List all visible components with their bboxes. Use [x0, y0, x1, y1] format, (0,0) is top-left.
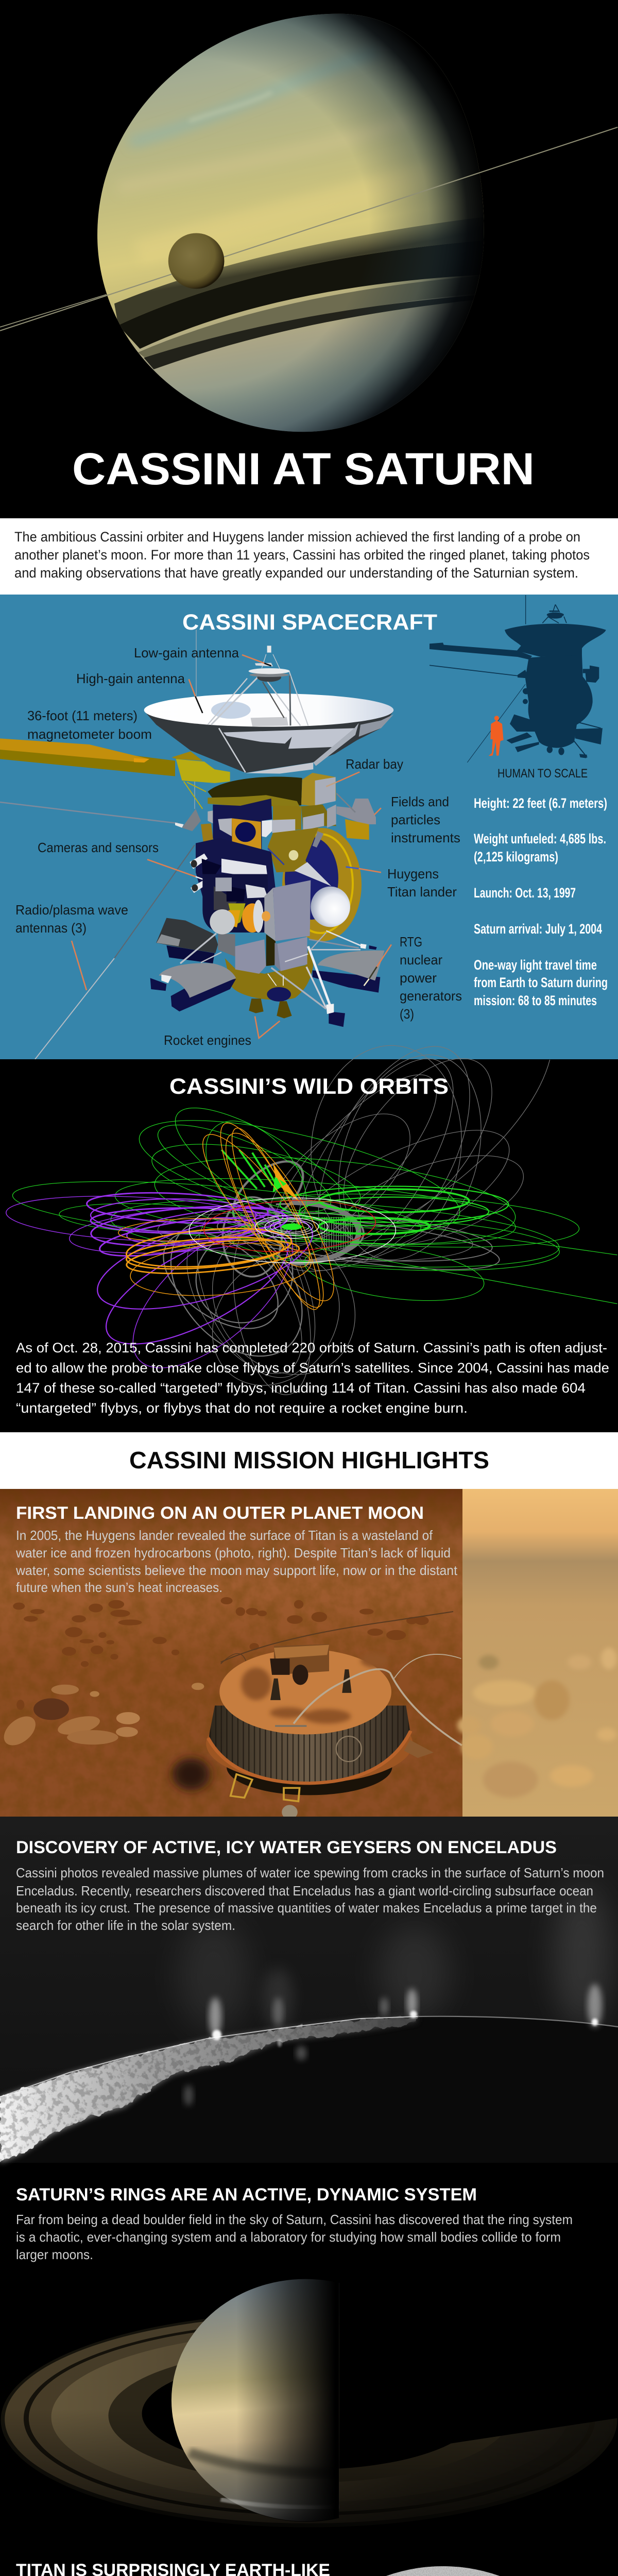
intro text: and making observations that have greatly expanded our understanding of the Saturnian system. — [14, 565, 578, 581]
component labels: HUMAN TO SCALE — [497, 767, 588, 781]
body text: water ice and frozen hydrocarbons (photo, right). Despite Titan’s lack of liquid — [15, 1545, 451, 1561]
moon: Titan — [168, 233, 224, 289]
gold band — [273, 805, 301, 831]
orbit text — [16, 1340, 609, 1416]
photo: Titan surface — [457, 1489, 618, 1817]
planet — [171, 2279, 339, 2522]
component labels: (3) — [400, 1006, 414, 1022]
grey orbits — [144, 1026, 550, 1406]
panel: Cassini's wild orbits — [0, 1026, 618, 1432]
component labels: Huygens — [387, 866, 439, 882]
cables — [221, 1612, 461, 1679]
body text — [15, 1528, 458, 1595]
moon orbits — [202, 1197, 377, 1256]
plumes — [184, 1984, 602, 2106]
radar bay — [301, 773, 336, 806]
component labels: Titan lander — [387, 884, 457, 900]
scale silhouette — [430, 595, 606, 762]
lander top deck — [219, 1649, 391, 1735]
component labels: antennas (3) — [15, 920, 87, 936]
purple orbits — [5, 1189, 324, 1392]
body text: In 2005, the Huygens lander revealed the surface of Titan is a wasteland of — [16, 1528, 433, 1543]
orbit text: “untargeted” flybys, or flybys that do not require a rocket engine burn. — [16, 1400, 468, 1416]
landing struts — [180, 931, 362, 1009]
photo: Titan moon — [386, 2566, 500, 2576]
low-gain antenna — [208, 646, 308, 725]
orbit text: ed to allow the probe to make close flybys of Saturn’s satellites. Since 2004, Cassini has made — [16, 1360, 609, 1376]
upper spacecraft — [0, 646, 393, 896]
legs — [231, 1774, 300, 1801]
heading: FIRST LANDING ON AN OUTER PLANET MOON — [16, 1503, 424, 1523]
callouts — [147, 655, 381, 880]
equipment boxes — [218, 880, 311, 974]
orange orbits — [118, 1114, 352, 1316]
navy hull — [202, 874, 268, 933]
body text: Far from being a dead boulder field in the sky of Saturn, Cassini has discovered that the ring system — [16, 2212, 573, 2227]
rocket engines — [249, 998, 292, 1019]
body text: future when the sun’s heat increases. — [16, 1580, 222, 1595]
component labels — [15, 645, 588, 1048]
panel: first landing on an outer planet moon — [0, 1489, 618, 1819]
component labels: nuclear — [400, 952, 442, 968]
orbit text: 147 of these so-called “targeted” flybys, including 114 of Titan. Cassini has also made 604 — [16, 1380, 586, 1396]
panel: introduction — [0, 518, 618, 595]
panel: mission highlights heading: CASSINI MISSION HIGHLIGHTS — [129, 1447, 489, 1473]
photo: Enceladus limb and plumes — [0, 1886, 618, 2163]
panel: Cassini spacecraft — [0, 595, 618, 1059]
lower spacecraft — [150, 874, 391, 1038]
component labels: power — [400, 970, 437, 986]
spacecraft stats: (2,125 kilograms) — [474, 849, 558, 865]
component labels: particles — [391, 812, 440, 827]
magnetometer boom — [0, 738, 230, 809]
image: Saturn and Titan — [0, 0, 617, 452]
panel: Titan — [16, 2564, 500, 2576]
body text: Enceladus. Recently, researchers discovered that Enceladus has a giant world-circling subsurface ocean — [16, 1883, 593, 1899]
component labels: Cameras and sensors — [38, 840, 159, 855]
component labels: magnetometer boom — [27, 726, 152, 742]
component labels: High-gain antenna — [76, 671, 185, 686]
lander base — [227, 1739, 392, 1795]
component labels: Rocket engines — [164, 1032, 251, 1048]
body text — [16, 1865, 604, 1933]
Huygens probe — [282, 828, 362, 941]
photo: Saturn and ring system — [0, 2276, 617, 2530]
title: CASSINI AT SATURN — [72, 444, 535, 494]
panel: Enceladus geysers — [0, 1817, 618, 2163]
body text — [16, 2212, 573, 2262]
rings line — [0, 127, 617, 331]
long antennas — [0, 630, 196, 1059]
magnetic instruments — [210, 900, 270, 935]
fields and particles instruments — [336, 793, 376, 840]
human figure to scale — [489, 716, 504, 756]
panel: mission highlights heading — [0, 1432, 618, 1489]
callouts — [255, 944, 391, 1038]
spacecraft stats: Launch: Oct. 13, 1997 — [474, 885, 576, 901]
component labels: generators — [400, 988, 462, 1004]
body text: beneath its icy crust. The presence of massive quantities of water makes Enceladus a prime target in the — [16, 1900, 597, 1916]
instrument pallet — [208, 799, 272, 854]
lower navy body with cameras — [190, 838, 284, 896]
component labels: Radio/plasma wave — [15, 902, 128, 918]
callout: radio antennas — [72, 941, 87, 990]
bus top dome — [208, 777, 302, 805]
dish underside — [144, 711, 393, 773]
rocks — [13, 1597, 429, 1710]
spacecraft stats — [474, 795, 608, 1008]
heading: CASSINI SPACECRAFT — [182, 610, 437, 635]
component labels: Radar bay — [346, 756, 403, 772]
component labels: Low-gain antenna — [134, 645, 239, 660]
puck — [267, 987, 291, 1002]
high-gain dish — [144, 693, 393, 727]
green orbits — [10, 1087, 617, 1310]
panel: Saturn's rings — [0, 2185, 617, 2530]
panel: hero Saturn image with title — [0, 0, 617, 494]
cone — [268, 828, 318, 872]
intro text — [14, 529, 590, 581]
orbit text: As of Oct. 28, 2015, Cassini has completed 220 orbits of Saturn. Cassini’s path is often adjust- — [16, 1340, 607, 1355]
component labels: instruments — [391, 830, 460, 845]
diagram: spacecraft — [0, 595, 606, 1059]
illustration: Huygens lander on Titan — [0, 1489, 462, 1819]
component labels: 36-foot (11 meters) — [27, 708, 138, 723]
component labels: RTG — [400, 934, 422, 950]
body text: is a chaotic, ever-changing system and a laboratory for studying how small bodies collide to form — [16, 2229, 561, 2245]
component labels: Fields and — [391, 794, 449, 809]
heading: DISCOVERY OF ACTIVE, ICY WATER GEYSERS ON ENCELADUS — [16, 1838, 557, 1857]
probe sphere — [311, 887, 350, 927]
intro text: another planet’s moon. For more than 11 years, Cassini has orbited the ringed planet, taking photos — [14, 547, 590, 563]
heading: SATURN’S RINGS ARE AN ACTIVE, DYNAMIC SYSTEM — [16, 2185, 477, 2205]
body text: search for other life in the solar system. — [16, 1918, 235, 1933]
intro text: The ambitious Cassini orbiter and Huygens lander mission achieved the first landing of a probe on — [14, 529, 580, 545]
RTG generators — [150, 918, 385, 1011]
dome — [225, 944, 313, 1000]
left sensor cluster — [175, 809, 214, 845]
body text: larger moons. — [16, 2247, 93, 2262]
body text: water, some scientists believe the moon may support life, now or in the distant — [15, 1563, 458, 1578]
chart: orbit tracks — [5, 1026, 617, 1406]
heading: CASSINI’S WILD ORBITS — [169, 1074, 449, 1099]
